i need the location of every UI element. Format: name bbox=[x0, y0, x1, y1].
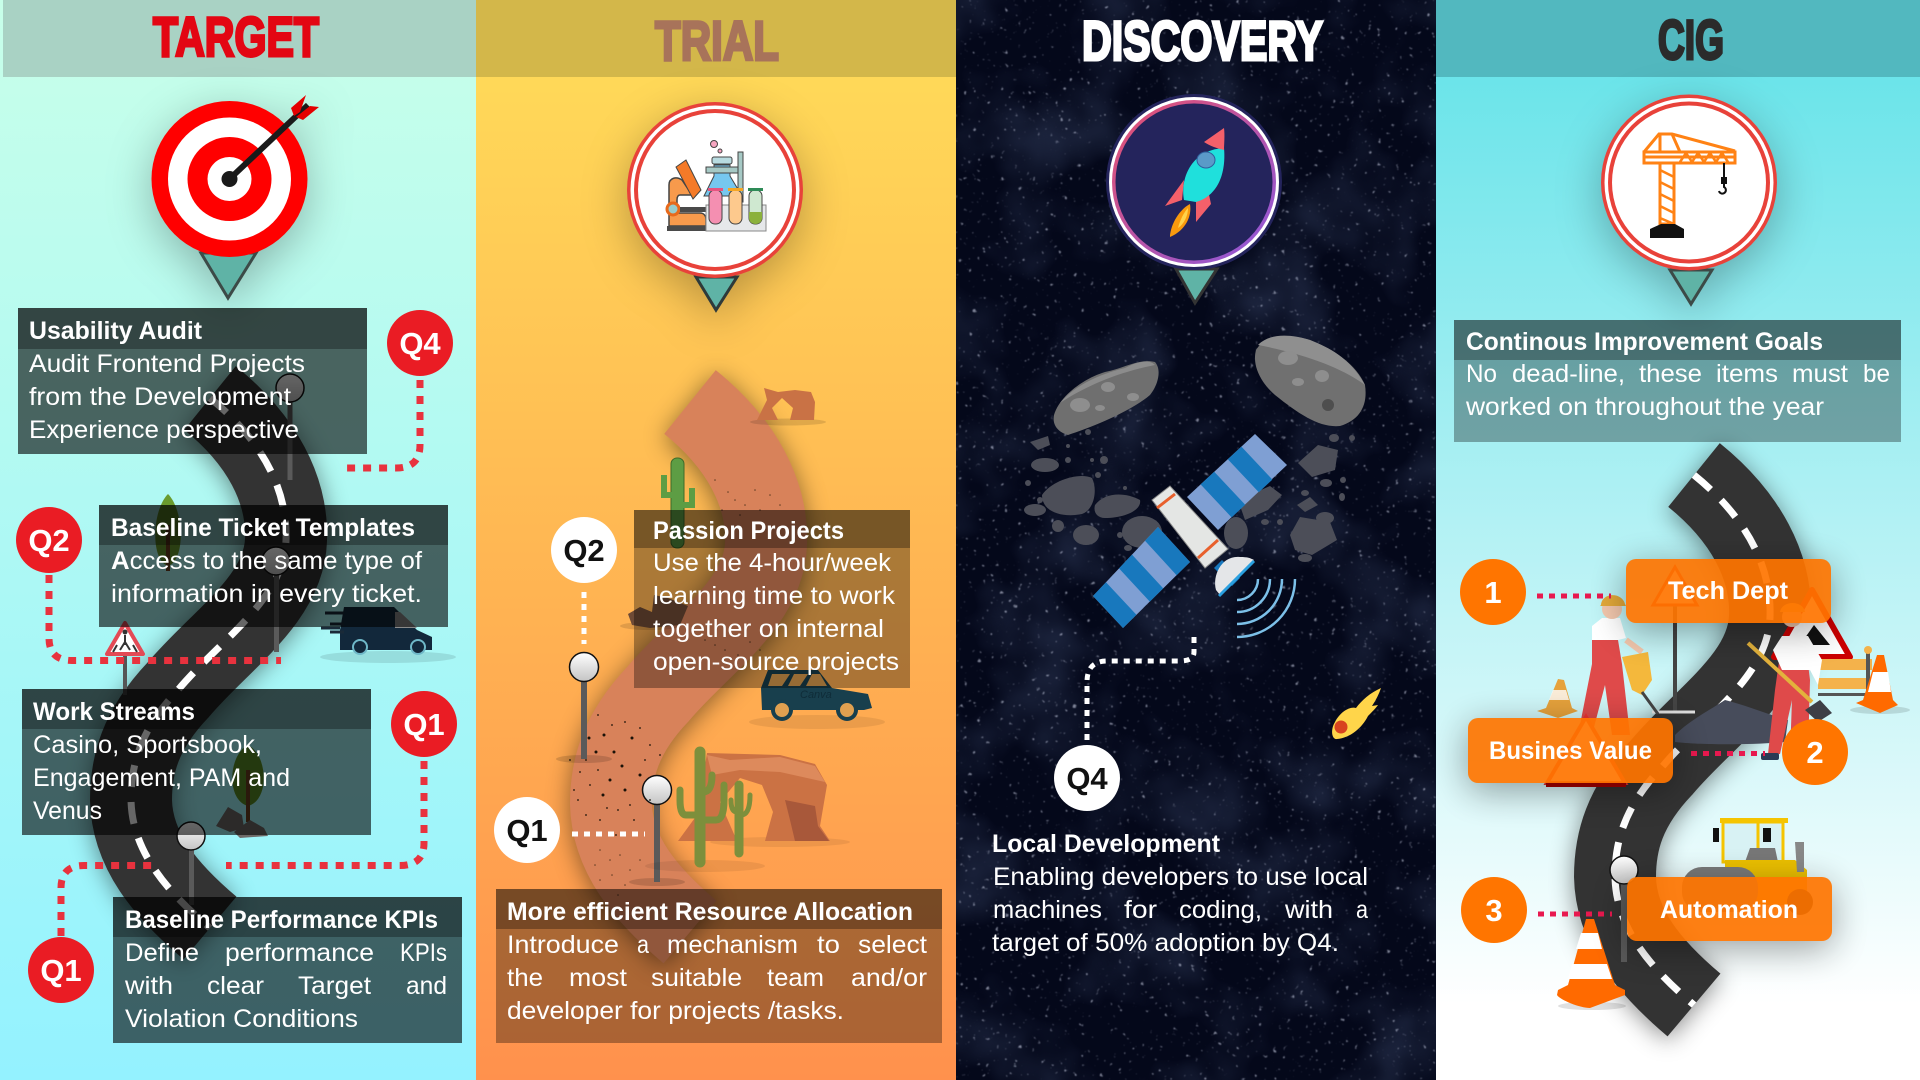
icon: pedestrian crossing sign bbox=[107, 623, 143, 695]
dotted connector: discovery bbox=[1087, 637, 1194, 742]
card: more efficient resource allocation: More efficient Resource Allocation bbox=[507, 898, 913, 926]
tag: tech dept bbox=[1626, 559, 1831, 623]
card: continous improvement goals: Continous Improvement Goals bbox=[1466, 328, 1823, 356]
card: more efficient resource allocation: suitable bbox=[651, 964, 742, 992]
icon: small traffic cone bbox=[1537, 679, 1578, 718]
card: baseline performance kpis: and bbox=[406, 972, 447, 1000]
badge: q2 trial bbox=[551, 517, 617, 583]
badge: 1 bbox=[1460, 559, 1526, 625]
card: usability audit: Audit Frontend Projects bbox=[29, 350, 305, 378]
signposts: trial bbox=[556, 652, 685, 886]
icon: large asteroid left bbox=[1054, 361, 1159, 435]
card: more efficient resource allocation: mechanism bbox=[667, 931, 798, 959]
header band: cig bbox=[1436, 0, 1920, 77]
card: passion projects: Passion Projects bbox=[653, 517, 844, 545]
icon: worker with jackhammer bbox=[1578, 595, 1658, 735]
icon: comet bbox=[1332, 688, 1381, 739]
card: usability audit: Experience perspective bbox=[29, 416, 299, 444]
card: more efficient resource allocation: select bbox=[858, 931, 927, 959]
icon: large traffic cone bbox=[1557, 919, 1626, 1010]
badge: q2 target bbox=[16, 507, 82, 573]
icon: road work signs and barricade bbox=[1652, 567, 1910, 714]
signposts: target bbox=[177, 374, 304, 905]
icon: trees and rocks bbox=[155, 494, 268, 838]
icon: laboratory pin bbox=[627, 102, 803, 310]
card: baseline ticket templates: Baseline Ticket Templates bbox=[111, 514, 415, 542]
card: continous improvement goals: items bbox=[1716, 360, 1778, 388]
panel: cig bbox=[1436, 0, 1920, 1080]
title: trial: TRIAL bbox=[655, 9, 779, 72]
card: more efficient resource allocation: Introduce bbox=[507, 931, 619, 959]
panel: trial bbox=[476, 0, 956, 1080]
text: local development: Enabling developers to use local bbox=[993, 863, 1368, 891]
icon: brown rocks bbox=[620, 595, 688, 630]
card: baseline performance kpis: clear bbox=[207, 972, 264, 1000]
header band: trial bbox=[476, 0, 956, 77]
badge: 3 bbox=[1461, 877, 1527, 943]
card: baseline performance kpis: KPIs bbox=[400, 939, 447, 967]
icon: rock debris field bbox=[1024, 429, 1355, 562]
card: baseline ticket templates: Access to the same type of bbox=[111, 547, 422, 575]
card: continous improvement goals: must bbox=[1792, 360, 1848, 388]
card: baseline performance kpis: Target bbox=[298, 972, 371, 1000]
icon: small rock arch bbox=[750, 388, 826, 426]
road: trial desert path bbox=[611, 402, 766, 932]
road: target bbox=[131, 398, 286, 928]
card: passion projects: Use the 4-hour/week bbox=[653, 549, 892, 577]
badge: 2 bbox=[1782, 719, 1848, 785]
card: continous improvement goals: these bbox=[1639, 360, 1702, 388]
card: more efficient resource allocation bbox=[496, 889, 942, 1043]
icon: target with arrow pin bbox=[152, 95, 319, 298]
tag: automation bbox=[1627, 877, 1832, 941]
card: baseline performance kpis: Baseline Performance KPIs bbox=[125, 906, 438, 934]
icon: road roller bbox=[1682, 818, 1813, 915]
card: usability audit: Usability Audit bbox=[29, 317, 203, 345]
card: baseline performance kpis: Define bbox=[125, 939, 199, 967]
card: more efficient resource allocation: and/or bbox=[851, 964, 927, 992]
road: cig bbox=[1615, 475, 1770, 1005]
card: passion projects: together on internal bbox=[653, 615, 884, 643]
tag: automation: Automation bbox=[1660, 896, 1798, 924]
card: baseline performance kpis bbox=[113, 897, 462, 1043]
icon: warning sign behind value tag bbox=[1546, 717, 1626, 787]
tag: tech dept: Tech Dept bbox=[1668, 577, 1789, 605]
card: continous improvement goals bbox=[1454, 320, 1901, 442]
card: more efficient resource allocation: to bbox=[817, 931, 840, 959]
text: local development: with bbox=[1284, 896, 1333, 924]
icon: asphalt pile bbox=[1675, 700, 1788, 744]
icon: jeep bbox=[749, 670, 885, 729]
badge: q4 target bbox=[387, 310, 453, 376]
card: baseline performance kpis: with bbox=[124, 972, 173, 1000]
card: baseline performance kpis: Violation Conditions bbox=[125, 1005, 358, 1033]
badge: 3: 3 bbox=[1485, 893, 1503, 928]
card: more efficient resource allocation: developer for projects /tasks. bbox=[507, 997, 844, 1025]
icon: crane pin bbox=[1601, 94, 1777, 304]
card: passion projects: open-source projects bbox=[653, 648, 899, 676]
card: continous improvement goals: worked on throughout the year bbox=[1465, 393, 1824, 421]
title: cig: CIG bbox=[1658, 8, 1724, 71]
badge: q4 discovery: Q4 bbox=[1066, 761, 1108, 796]
dotted connectors: target bbox=[49, 380, 424, 936]
signpost: cig bbox=[1610, 856, 1638, 962]
texture: dust speckles on the road bbox=[570, 480, 780, 895]
card: more efficient resource allocation: most bbox=[569, 964, 627, 992]
badge: q1 trial bbox=[494, 797, 560, 863]
badge: q1 trial: Q1 bbox=[506, 813, 548, 848]
badge: q1 left target: Q1 bbox=[40, 953, 82, 988]
text: local development: a bbox=[1356, 896, 1368, 924]
title: discovery: DISCOVERY bbox=[1082, 9, 1323, 72]
text: local development: machines bbox=[993, 896, 1102, 924]
icon: large asteroid right bbox=[1255, 336, 1366, 426]
card: work streams: Engagement, PAM and bbox=[33, 764, 290, 792]
badge: q1 right target bbox=[391, 691, 457, 757]
badge: q2 target: Q2 bbox=[28, 523, 70, 558]
card: continous improvement goals: be bbox=[1863, 360, 1890, 388]
card: baseline ticket templates bbox=[99, 505, 448, 627]
badge: q4 target: Q4 bbox=[399, 326, 441, 361]
badge: q4 discovery bbox=[1054, 745, 1120, 811]
dotted connectors: cig bbox=[1537, 596, 1765, 914]
card: more efficient resource allocation: the bbox=[507, 964, 543, 992]
badge: 2: 2 bbox=[1806, 735, 1824, 770]
card: more efficient resource allocation: team bbox=[767, 964, 824, 992]
tag: busines value bbox=[1468, 718, 1673, 783]
card: work streams: Work Streams bbox=[33, 698, 195, 726]
icon: satellite bbox=[1093, 434, 1287, 628]
icon: delivery van bbox=[320, 607, 456, 663]
card: usability audit: from the Development bbox=[29, 383, 291, 411]
badge: 1: 1 bbox=[1484, 575, 1502, 610]
icon: worker with shovel bbox=[1748, 603, 1832, 760]
card: work streams: Venus bbox=[33, 797, 102, 825]
badge: q1 left target bbox=[28, 937, 94, 1003]
text: local development: for bbox=[1124, 896, 1157, 924]
card: baseline performance kpis: performance bbox=[225, 939, 374, 967]
dotted connectors: trial bbox=[572, 592, 645, 834]
icon: saguaro cacti bbox=[645, 752, 765, 872]
card: usability audit bbox=[18, 308, 367, 454]
card: passion projects: learning time to work bbox=[653, 582, 896, 610]
icon: rocket pin bbox=[1106, 94, 1282, 303]
icon: small cactus bbox=[664, 458, 692, 548]
card: baseline ticket templates: information in every ticket. bbox=[111, 580, 422, 608]
badge: q1 right target: Q1 bbox=[403, 707, 445, 742]
card: work streams: Casino, Sportsbook, bbox=[33, 731, 262, 759]
card: continous improvement goals: No bbox=[1466, 360, 1497, 388]
card: work streams bbox=[22, 689, 371, 835]
badge: q2 trial: Q2 bbox=[563, 533, 605, 568]
icon: jeep: Canva bbox=[800, 689, 832, 701]
panel: target bbox=[0, 0, 476, 1080]
card: passion projects bbox=[634, 510, 910, 688]
icon: signal waves bbox=[1237, 579, 1295, 637]
card: more efficient resource allocation: a bbox=[637, 931, 649, 959]
text: local development: Local Development bbox=[992, 830, 1221, 858]
panel: discovery bbox=[956, 0, 1436, 1080]
header band: target bbox=[3, 0, 476, 77]
icon: large rock arch bbox=[678, 753, 850, 847]
text: local development: coding, bbox=[1179, 896, 1262, 924]
text: local development: target of 50% adoption by Q4. bbox=[992, 929, 1339, 957]
title: target: TARGET bbox=[153, 5, 319, 68]
card: continous improvement goals: dead-line, bbox=[1512, 360, 1625, 388]
text: local development bbox=[992, 830, 1368, 957]
tag: busines value: Busines Value bbox=[1489, 737, 1652, 765]
